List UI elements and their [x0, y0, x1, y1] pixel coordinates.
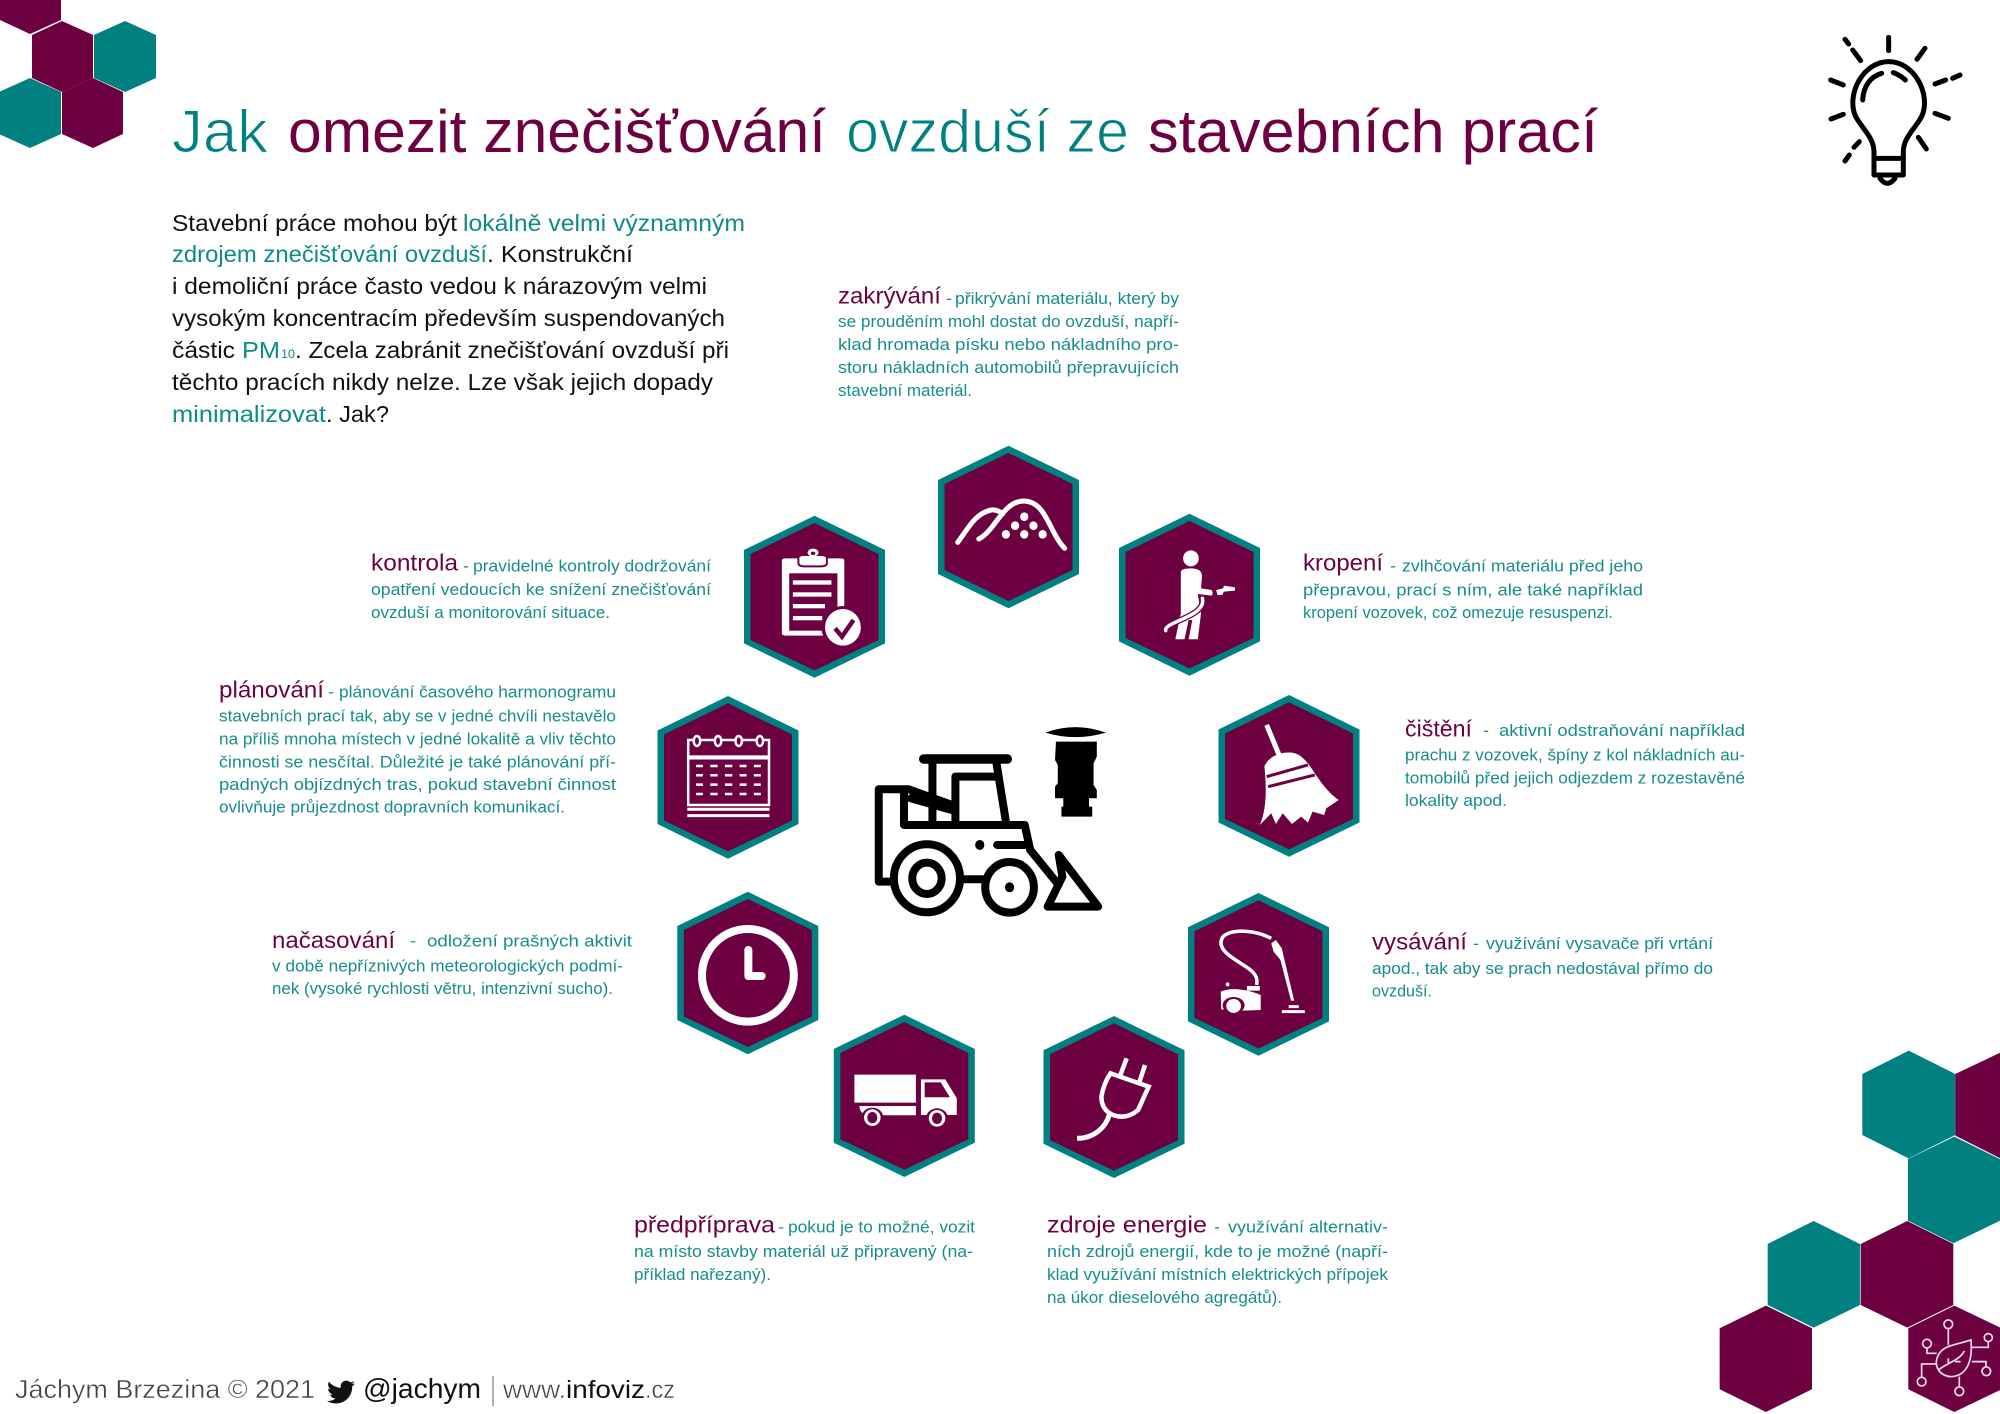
text block: plánování: na příliš mnoha místech v jedné lokalitě a vliv těchto [219, 730, 616, 749]
text block: předpříprava: pokud je to možné, vozit [788, 1218, 975, 1236]
intro paragraph: částic [172, 337, 235, 363]
hexagon: vysávání (vacuum cleaner) [1188, 893, 1329, 1056]
text block: zdroje energie: klad využívání místních elektrických přípojek [1047, 1265, 1388, 1284]
text block: plánování: plánování [219, 676, 325, 702]
text block: kontrola [371, 550, 711, 622]
title [172, 98, 1598, 165]
text block: čištění: tomobilů před jejich odjezdem z rozestavěné [1405, 768, 1745, 787]
footer credits [15, 1373, 675, 1406]
text block: zakrývání: přikrývání materiálu, který by [955, 289, 1180, 308]
text block: zdroje energie [1047, 1212, 1388, 1307]
text block: načasování: načasování [272, 927, 396, 953]
text block: plánování: činnosti se nesčítal. Důležité je také plánování pří- [219, 752, 616, 771]
text block: vysávání: ovzduší. [1372, 982, 1432, 1001]
text block: vysávání: vysávání [1372, 928, 1468, 954]
text block: zakrývání [838, 282, 1180, 400]
footer credits: .cz [645, 1376, 675, 1404]
footer credits: infoviz [566, 1376, 645, 1404]
intro paragraph: i demoliční práce často vedou k nárazovým velmi [172, 273, 707, 299]
intro paragraph: PM [242, 337, 280, 363]
text block: předpříprava: - [778, 1218, 784, 1236]
text block: načasování: - [410, 932, 416, 951]
intro paragraph: vysokým koncentracím především suspendovaných [172, 305, 725, 331]
intro paragraph: . Konstrukční [487, 241, 634, 267]
text block: čištění: - [1483, 721, 1489, 740]
intro paragraph: minimalizovat [172, 401, 327, 427]
text block: plánování: padných objízdných tras, pokud stavební činnost [219, 775, 616, 794]
icon: leaf with circuit nodes [1917, 1320, 1992, 1396]
intro paragraph: . Zcela zabránit znečišťování ovzduší při [295, 337, 729, 363]
title: Jak [172, 98, 269, 165]
text block: vysávání [1372, 928, 1713, 1001]
hexagon: čištění (broom) [1218, 695, 1360, 857]
text block: načasování [272, 927, 632, 998]
icon: twitter bird [327, 1381, 355, 1403]
hexagon: načasování (clock) [677, 892, 818, 1054]
text block: předpříprava: příklad nařezaný). [634, 1265, 771, 1284]
text block: plánování: plánování časového harmonogramu [339, 682, 616, 701]
text block: plánování: - [328, 682, 334, 701]
intro paragraph: 10 [281, 347, 295, 361]
text block: kropení [1303, 550, 1643, 622]
text block: plánování [219, 676, 616, 817]
icon: tractor / loader with exhaust [879, 727, 1106, 913]
text block: kontrola: opatření vedoucích ke snížení znečišťování [371, 580, 711, 599]
text block: kropení: kropení vozovek, což omezuje resuspenzi. [1303, 603, 1613, 622]
text block: načasování: nek (vysoké rychlosti větru, intenzivní sucho). [272, 979, 613, 998]
text block: plánování: stavebních prací tak, aby se v jedné chvíli nestavělo [219, 707, 616, 726]
text block: zdroje energie: využívání alternativ- [1228, 1218, 1388, 1236]
text block: zdroje energie: ních zdrojů energií, kde to je možné (napří- [1047, 1242, 1388, 1261]
text block: kontrola: - [463, 556, 469, 576]
text block: předpříprava: předpříprava [634, 1212, 775, 1238]
text block: zakrývání: - [946, 289, 952, 308]
text block: předpříprava: na místo stavby materiál už připravený (na- [634, 1242, 973, 1261]
text block: zakrývání: klad hromada písku nebo nákladního pro- [838, 335, 1179, 354]
intro paragraph: lokálně velmi významným [463, 210, 745, 236]
text block: vysávání: - [1473, 934, 1479, 953]
text block: čištění: aktivní odstraňování například [1499, 721, 1745, 740]
text block: kropení: kropení [1303, 550, 1384, 576]
title: stavebních prací [1148, 98, 1598, 165]
text block: čištění [1405, 716, 1745, 810]
hexagon: zakrývání (mound) [938, 446, 1079, 608]
hexagon: kontrola (clipboard) [744, 516, 885, 678]
text block: předpříprava [634, 1212, 975, 1284]
footer credits: www. [502, 1376, 566, 1404]
text block: kontrola: kontrola [371, 550, 458, 576]
text block: čištění: čištění [1405, 716, 1473, 742]
text block: zdroje energie: na úkor dieselového agregátů). [1047, 1288, 1282, 1307]
text block: kontrola: ovzduší a monitorování situace. [371, 603, 610, 622]
intro paragraph: Stavební práce mohou být [172, 210, 458, 236]
text block: načasování: odložení prašných aktivit [427, 932, 632, 951]
intro paragraph [172, 210, 745, 427]
text block: zdroje energie: - [1214, 1218, 1220, 1236]
hexagon: předpříprava (truck) [834, 1015, 975, 1177]
icon: light bulb [1831, 37, 1960, 183]
hexagon: kropení (sprayer) [1119, 514, 1260, 676]
title: omezit znečišťování [288, 98, 826, 165]
intro paragraph: . Jak? [326, 401, 389, 427]
text block: zakrývání: zakrývání [838, 282, 942, 308]
footer credits: Jáchym Brzezina © 2021 [15, 1374, 315, 1404]
text block: kropení: přepravou, prací s ním, ale také například [1303, 580, 1643, 600]
text block: zdroje energie: zdroje energie [1047, 1212, 1207, 1238]
intro paragraph: zdrojem znečišťování ovzduší [172, 241, 488, 267]
hexagon: plánování (calendar) [658, 696, 798, 859]
text block: načasování: v době nepříznivých meteorologických podmí- [272, 957, 623, 976]
footer credits: @jachym [363, 1373, 481, 1404]
text block: kropení: - [1390, 556, 1396, 576]
decoration: top-left hexagon cluster [0, 0, 156, 148]
text block: kropení: zvlhčování materiálu před jeho [1402, 556, 1643, 576]
text block: čištění: lokality apod. [1405, 791, 1507, 810]
hexagon: zdroje energie (plug) [1044, 1016, 1184, 1178]
text block: plánování: ovlivňuje průjezdnost dopravních komunikací. [219, 798, 565, 817]
text block: kontrola: pravidelné kontroly dodržování [473, 556, 711, 576]
intro paragraph: těchto pracích nikdy nelze. Lze však jejich dopady [172, 369, 714, 395]
text block: vysávání: využívání vysavače při vrtání [1486, 934, 1713, 953]
title: ovzduší ze [846, 98, 1129, 165]
text block: vysávání: apod., tak aby se prach nedostával přímo do [1372, 959, 1713, 978]
text block: zakrývání: se prouděním mohl dostat do ovzduší, napří- [838, 312, 1179, 331]
text block: zakrývání: stavební materiál. [838, 381, 972, 400]
text block: čištění: prachu z vozovek, špíny z kol nákladních au- [1405, 746, 1745, 765]
text block: zakrývání: storu nákladních automobilů přepravujících [838, 358, 1179, 377]
decoration: bottom-right hexagon cluster [1720, 1051, 2000, 1412]
